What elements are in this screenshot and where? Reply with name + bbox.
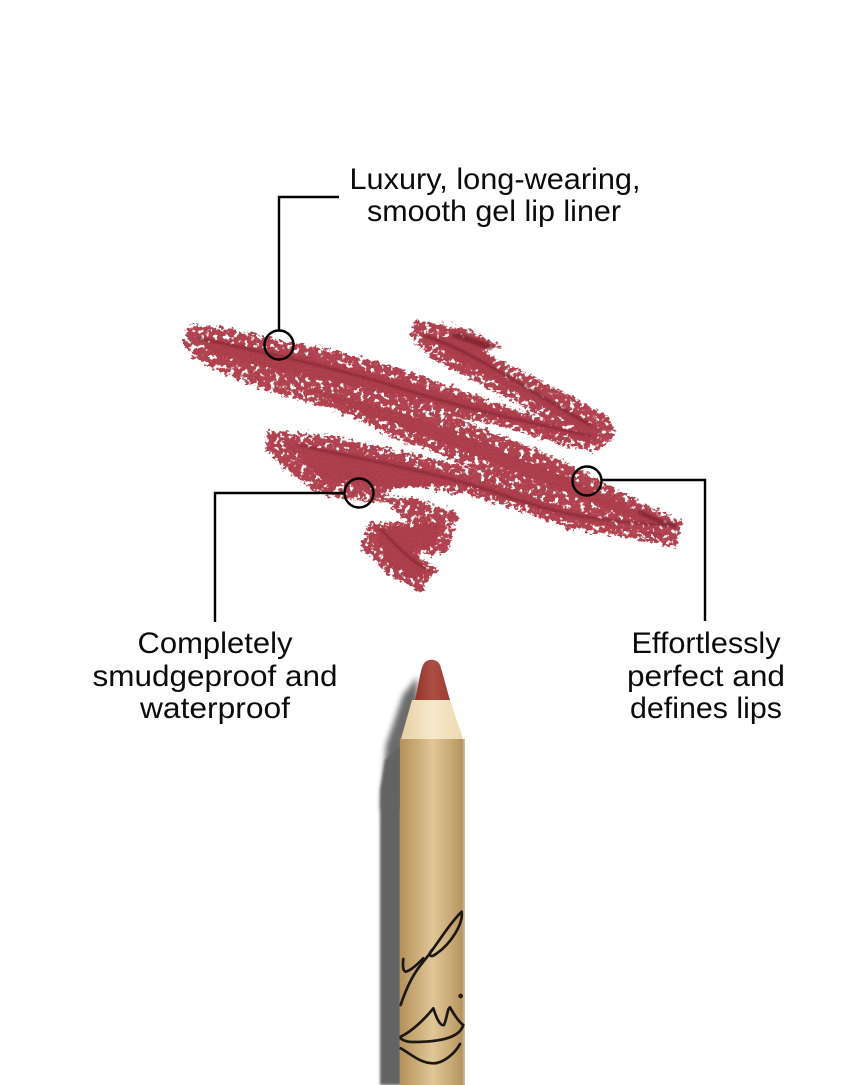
marker circle [344,478,374,508]
pencil wood [401,700,463,739]
marker circle [264,330,294,360]
callout text: Luxury, long-wearing, [350,163,640,196]
connector line [602,480,705,621]
callout: smudgeproof [138,478,374,660]
connector line [279,197,339,330]
callout text line two: perfect and [627,660,785,693]
marker circle [572,466,602,496]
swatch solid core strokes [195,334,670,582]
swatch outer textured strokes [183,321,682,592]
callout text: Effortlessly [632,627,781,660]
lip liner swatch [183,321,682,592]
callout text line three: defines lips [630,692,782,725]
connector line [215,493,344,622]
callout: effortlessly perfect [572,466,781,660]
pencil [380,660,465,1085]
callout: luxury gel liner [264,163,640,360]
pencil lead tip [415,660,450,700]
callout text line two: smooth gel lip liner [367,195,621,228]
pencil shadow [380,677,418,1085]
callout text line three: waterproof [139,692,291,725]
pencil gold barrel [400,739,465,1085]
callout text: Completely [138,627,293,660]
swatch dark streaks [200,335,675,570]
pencil lips logo [401,912,463,1063]
callout text line two: smudgeproof and [92,660,338,693]
